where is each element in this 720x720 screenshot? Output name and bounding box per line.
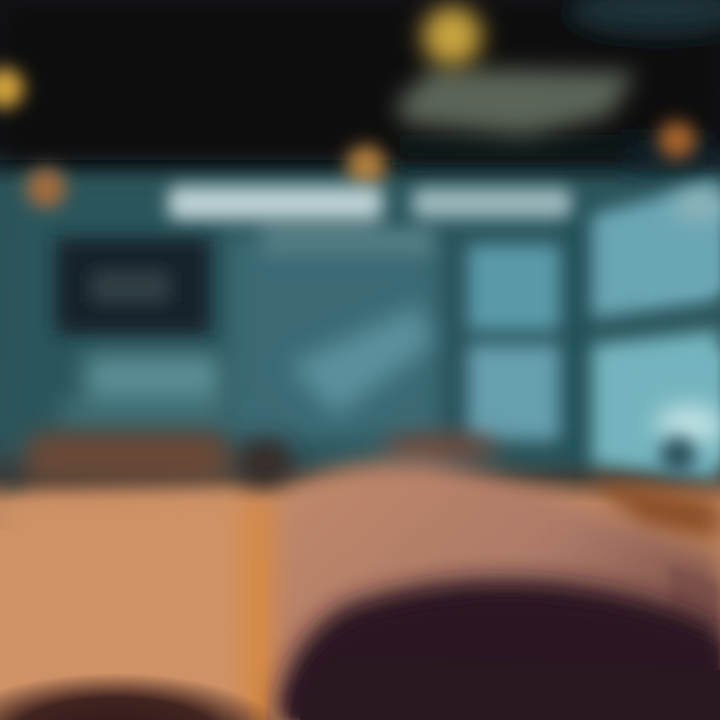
table edge fill: right mound <box>670 565 720 650</box>
dark ceiling <box>0 0 720 170</box>
light: far left <box>0 68 24 108</box>
pendant lights <box>0 6 696 208</box>
seated figure <box>660 437 696 473</box>
windows <box>468 180 720 480</box>
dark blob: solid core <box>288 602 720 720</box>
table surface <box>0 461 720 720</box>
dark blob: blurred outline <box>276 579 720 720</box>
light: top centre <box>422 6 482 66</box>
window glare and figure <box>656 191 720 445</box>
table edge fill: left plank <box>0 525 226 720</box>
table: left plank and mound <box>0 461 720 720</box>
blurred sign <box>168 186 572 254</box>
light: middle <box>346 145 386 185</box>
teal wall <box>0 180 720 470</box>
dark foreground shapes <box>0 579 720 720</box>
lower wall panel <box>60 305 432 430</box>
brown furniture row <box>0 432 720 540</box>
light: right <box>658 121 696 159</box>
table edge fill: centre stripe <box>250 560 266 720</box>
dark blob: bottom edge fill <box>300 655 720 720</box>
dark wall board <box>56 238 210 334</box>
ceiling panel <box>395 68 636 136</box>
dark corner: bottom left <box>0 670 290 720</box>
window edge fill <box>640 200 720 462</box>
blurred window panes <box>468 180 720 480</box>
light: left <box>26 168 66 208</box>
